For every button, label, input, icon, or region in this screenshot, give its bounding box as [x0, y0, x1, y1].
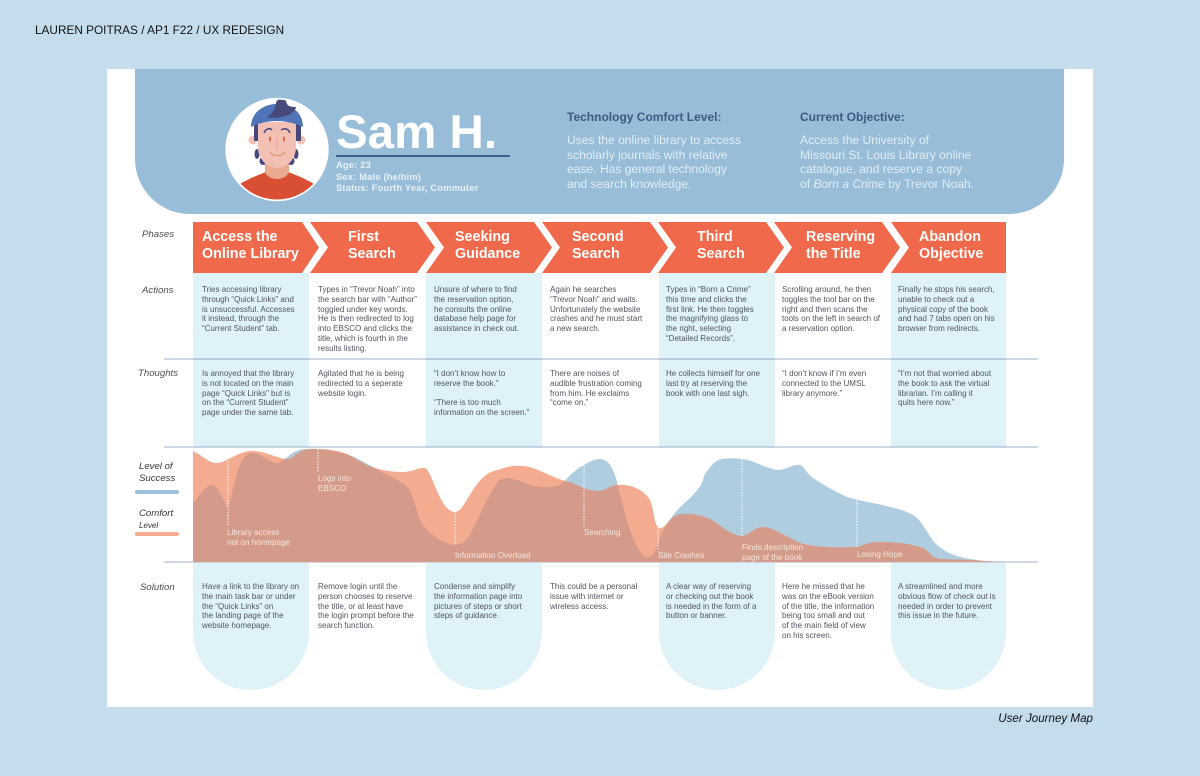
phase 6 title: [806, 229, 875, 262]
chart annotations: Site Crashes: [658, 551, 704, 560]
thought 6: [782, 369, 866, 398]
action 5: the right, selecting: [666, 324, 731, 333]
solution 3: pictures of steps or short: [434, 602, 522, 610]
solution 5: is needed in the form of a: [666, 602, 756, 610]
solution 7: A streamlined and more: [898, 582, 983, 591]
phase 3 title: [455, 229, 520, 262]
action 4: Again he searches: [550, 285, 616, 294]
action 1: through “Quick Links” and: [202, 295, 294, 304]
solution 7: [898, 582, 996, 620]
legend: level of success: [135, 461, 179, 494]
legend: comfort level: Level: [139, 521, 158, 530]
phase 3 title: Seeking: [455, 229, 510, 245]
solution 1: the “Quick Links” on: [202, 602, 273, 610]
thought 4: audible frustration coming: [550, 379, 642, 388]
chart annotations: Library access: [227, 528, 279, 537]
area: level of success: [193, 449, 1006, 562]
action 2: into EBSCO and clicks the: [318, 324, 412, 333]
thought 4: “come on.”: [550, 398, 588, 407]
action 4: a new search.: [550, 324, 600, 333]
action 5: Types in “Born a Crime”: [666, 285, 751, 294]
thought 7: quits here now.”: [898, 398, 955, 407]
action 2: Types in “Trevor Noah” into: [318, 285, 415, 294]
phase 7 title: Abandon: [919, 229, 981, 245]
action 4: crashes and he must start: [550, 314, 642, 323]
action 5: first link. He then toggles: [666, 304, 754, 314]
solution band 7: [891, 563, 1006, 690]
thought 2: redirected to a seperate: [318, 379, 403, 388]
solution 2: [318, 582, 414, 630]
thought 3: “There is too much: [434, 398, 501, 407]
action 2: results listing.: [318, 344, 367, 352]
dotted markers: [228, 449, 857, 550]
solution 1: the landing page of the: [202, 611, 284, 620]
panel: persona header: [135, 69, 1064, 214]
current objective text: Missouri St. Louis Library online: [800, 148, 971, 162]
solution 5: button or banner.: [666, 611, 727, 620]
thought 5: last try at reserving the: [666, 379, 747, 388]
thought 5: book with one last sigh.: [666, 388, 749, 398]
action 1: [202, 285, 295, 333]
thought 2: website login.: [318, 388, 367, 398]
action 6: [782, 285, 880, 333]
action 6: Scrolling around, he then: [782, 285, 871, 294]
persona details: Status: Fourth Year, Commuter: [336, 183, 479, 193]
column band 7: [891, 273, 1006, 447]
action 5: the magnifying glass to: [666, 314, 748, 323]
action 1: is unsuccessful. Accesses: [202, 304, 295, 314]
action 7: and had 7 tabs open on his: [898, 314, 995, 323]
action 7: Finally he stops his search,: [898, 285, 995, 294]
thought 3: information on the screen.”: [434, 408, 529, 417]
thought 1: page under the same tab.: [202, 408, 293, 417]
top label: LAUREN POITRAS / AP1 F22 / UX REDESIGN: [35, 23, 284, 37]
action 6: toggles the tool bar on the: [782, 295, 875, 304]
solution 7: obvious flow of check out is: [898, 592, 996, 601]
solution 1: [202, 582, 299, 630]
solution 2: the login prompt before the: [318, 611, 414, 620]
solution 2: person chooses to reserve: [318, 592, 412, 601]
thought 7: librarian. I’m calling it: [898, 388, 973, 398]
chart annotations: Losing Hope: [857, 550, 903, 559]
persona details: Sex: Male (he/him): [336, 172, 421, 182]
action 3: [434, 285, 519, 333]
thought 7: “I’m not that worried about: [898, 369, 991, 378]
solution 3: Condense and simplify: [434, 582, 515, 591]
technology comfort text: ease. Has general technology: [567, 162, 727, 176]
action 6: tools on the left in search of: [782, 314, 880, 323]
solution 1: website homepage.: [202, 621, 272, 630]
column band 1: [193, 273, 309, 447]
legend: comfort level: [135, 508, 179, 536]
current objective text: of Born a Crime by Trevor Noah.: [800, 177, 974, 191]
action 3: assistance in check out.: [434, 324, 519, 333]
chart annotations: not on homepage: [227, 538, 291, 547]
solution 6: of the main field of view: [782, 621, 866, 630]
persona name: Sam H.: [336, 106, 497, 159]
solution 2: the title, or at least have: [318, 602, 403, 610]
phase 4 title: [572, 229, 624, 262]
action 3: database help page for: [434, 314, 516, 323]
area: overlap: [193, 449, 1006, 562]
action 5: this time and clicks the: [666, 295, 747, 304]
thought 6: “I don’t know if I’m even: [782, 369, 866, 378]
phase 6 title: the Title: [806, 246, 861, 262]
action 2: toggled under key words.: [318, 304, 408, 314]
column band 5: [659, 273, 775, 447]
solution 4: wireless access.: [550, 602, 608, 610]
action 7: physical copy of the book: [898, 304, 988, 314]
area: comfort level: [193, 449, 1006, 562]
action 4: [550, 285, 642, 333]
action 2: He is then redirected to log: [318, 314, 414, 323]
column band 3: [426, 273, 542, 447]
row label: thoughts: Thoughts: [138, 368, 178, 379]
phase 7 title: Objective: [919, 246, 983, 262]
caption: User Journey Map: [998, 712, 1093, 725]
legend: level of success: Level of: [139, 461, 173, 472]
solution 6: on his screen.: [782, 631, 832, 640]
thought 1: page “Quick Links” but is: [202, 388, 290, 398]
thought 1: Is annoyed that the library: [202, 369, 294, 378]
phase 3 title: Guidance: [455, 246, 520, 262]
thought 4: [550, 369, 642, 407]
solution band 1: [193, 563, 309, 690]
solution 3: [434, 582, 522, 620]
thought 2: Agitated that he is being: [318, 369, 404, 378]
phase 2 title: Search: [348, 246, 396, 262]
solution 4: [550, 582, 637, 610]
action 3: he consults the online: [434, 304, 512, 314]
solution 6: Here he missed that he: [782, 582, 865, 591]
thought 5: He collects himself for one: [666, 369, 760, 378]
solution 6: [782, 582, 874, 640]
technology comfort text: [567, 133, 741, 191]
solution 2: search function.: [318, 621, 375, 630]
action 3: the reservation option,: [434, 295, 513, 304]
chart: success and comfort curves: [193, 448, 1000, 562]
row label: actions: Actions: [142, 285, 173, 296]
thought 7: [898, 369, 992, 407]
current objective text: catalogue, and reserve a copy: [800, 162, 962, 176]
persona details: [336, 160, 479, 193]
solution 5: [666, 582, 756, 620]
legend: level of success: Success: [139, 473, 175, 484]
solution band 3: [426, 563, 542, 690]
thought 1: [202, 369, 294, 417]
solution 7: this issue in the future.: [898, 611, 978, 620]
action 2: [318, 285, 417, 352]
solution 5: or checking out the book: [666, 592, 753, 601]
action 4: Unfortunately the website: [550, 304, 640, 314]
persona details: Age: 23: [336, 160, 371, 170]
phase 4 title: Search: [572, 246, 620, 262]
action 1: Tries accessing library: [202, 285, 281, 294]
thought 4: from him. He exclaims: [550, 388, 629, 398]
panel: journey map card: [107, 69, 1093, 707]
solution 4: This could be a personal: [550, 582, 637, 591]
action 1: “Current Student” tab.: [202, 324, 280, 333]
solution 6: of the title, the information: [782, 602, 874, 610]
solution 3: the information page into: [434, 592, 522, 601]
action 7: unable to check out a: [898, 295, 974, 304]
phase 5 title: [697, 229, 745, 262]
row label: phases: Phases: [142, 229, 174, 240]
icon: avatar: [225, 98, 329, 202]
solution 2: Remove login until the: [318, 582, 397, 591]
chart annotations: Finds description: [742, 543, 803, 552]
chart annotations: EBSCO: [318, 484, 346, 493]
thought 5: [666, 369, 760, 398]
chart annotations: Logs into: [318, 474, 351, 483]
solution 3: steps of guidance.: [434, 611, 499, 620]
thought 6: connected to the UMSL: [782, 379, 866, 388]
action 2: title, which is fourth in the: [318, 334, 408, 343]
thought 3: “I don’t know how to: [434, 369, 505, 378]
action 6: right and then scans the: [782, 304, 868, 314]
action 1: it instead, through the: [202, 314, 279, 323]
phase 1 title: Online Library: [202, 246, 299, 262]
phase 1 title: [202, 229, 299, 262]
chart annotations: [227, 474, 903, 562]
technology comfort text: scholarly journals with relative: [567, 148, 728, 162]
phase 2 title: First: [348, 229, 379, 245]
current objective text: Access the University of: [800, 133, 929, 147]
solution 7: needed in order to prevent: [898, 602, 992, 610]
technology comfort text: and search knowledge.: [567, 177, 691, 191]
row label: solution: Solution: [140, 582, 175, 593]
action 5: [666, 285, 754, 343]
chart annotations: Information Overload: [455, 551, 531, 560]
thought 3: reserve the book.”: [434, 379, 499, 388]
phase 4 title: Second: [572, 229, 624, 245]
phase 2 title: [348, 229, 396, 262]
phase 5 title: Third: [697, 229, 733, 245]
chart annotations: Searching: [584, 528, 620, 537]
thought 7: the book to ask the virtual: [898, 379, 989, 388]
solution 6: being too small and out: [782, 611, 865, 620]
phase arrows: [193, 222, 1006, 273]
solution 1: the main task bar or under: [202, 592, 296, 601]
phase 1 title: Access the: [202, 229, 278, 245]
solution 1: Have a link to the library on: [202, 582, 299, 591]
solution 6: was on the eBook version: [782, 592, 874, 601]
action 2: the search bar with “Author”: [318, 295, 417, 304]
phase 7 title: [919, 229, 983, 262]
action 3: Unsure of where to find: [434, 285, 517, 294]
technology comfort heading: Technology Comfort Level:: [567, 110, 721, 124]
thought 2: [318, 369, 404, 398]
action 6: a reservation option.: [782, 324, 855, 333]
chart annotations: page of the book: [742, 553, 803, 562]
thought 3: [434, 369, 529, 417]
phase 6 title: Reserving: [806, 229, 875, 245]
action 4: “Trevor Noah” and waits.: [550, 295, 638, 304]
legend: comfort level: Comfort: [139, 508, 173, 519]
thought 6: library anymore.”: [782, 388, 842, 398]
thought 1: is not located on the main: [202, 379, 293, 388]
solution 5: A clear way of reserving: [666, 582, 751, 591]
current objective heading: Current Objective:: [800, 110, 905, 124]
solution 4: issue with internet or: [550, 592, 624, 601]
action 7: browser from redirects.: [898, 324, 980, 333]
solution band 5: [659, 563, 775, 690]
phase 5 title: Search: [697, 246, 745, 262]
technology comfort text: Uses the online library to access: [567, 133, 741, 147]
thought 1: on the “Current Student”: [202, 398, 288, 407]
action 5: “Detailed Records”.: [666, 334, 735, 343]
current objective text: [800, 133, 974, 191]
name underline: [336, 155, 510, 157]
action 7: [898, 285, 995, 333]
thought 4: There are noises of: [550, 369, 619, 378]
